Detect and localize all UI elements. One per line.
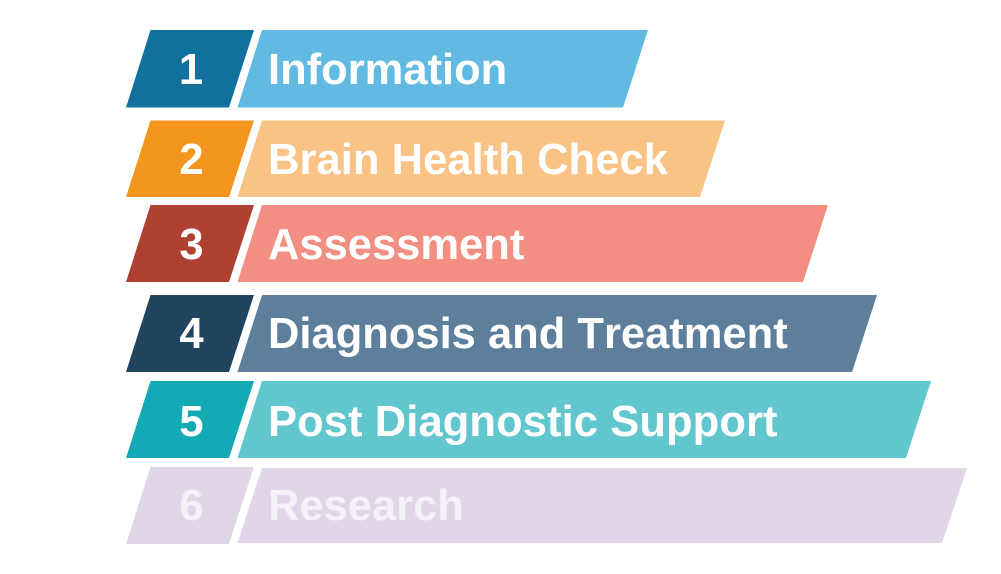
label bar: Assessment: Assessment [268, 221, 524, 269]
row 2: Brain Health Check [126, 120, 725, 197]
number badge 6 [126, 467, 254, 544]
number badge 3: 3 [179, 221, 204, 269]
row 4: Diagnosis and Treatment [126, 295, 877, 372]
label bar: Assessment [238, 205, 828, 282]
label bar: Brain Health Check: Brain Health Check [268, 136, 669, 184]
label bar: Diagnosis and Treatment: Diagnosis and Treatment [268, 310, 788, 358]
number badge 1: 1 [179, 46, 203, 94]
row 3: Assessment [126, 205, 828, 282]
number badge 4: 4 [179, 310, 204, 358]
number badge 6: 6 [179, 482, 204, 530]
row 5: Post Diagnostic Support [126, 381, 931, 458]
row 6: Research [126, 467, 967, 544]
label bar: Information: Information [268, 46, 507, 94]
label bar: Brain Health Check [238, 120, 725, 197]
label bar: Diagnosis and Treatment [238, 295, 877, 372]
number badge 1 [126, 30, 254, 108]
number badge 5 [126, 381, 254, 458]
label bar: Research: Research [268, 482, 464, 530]
number badge 2: 2 [179, 136, 204, 184]
label bar: Information [238, 30, 648, 108]
number badge 5: 5 [179, 398, 204, 446]
label bar: Post Diagnostic Support [238, 381, 931, 458]
row 1: Information [126, 30, 648, 108]
number badge 4 [126, 295, 254, 372]
label bar: Research [238, 468, 967, 543]
number badge 2 [126, 120, 254, 197]
number badge 3 [126, 205, 254, 282]
label bar: Post Diagnostic Support: Post Diagnostic Support [268, 398, 778, 446]
